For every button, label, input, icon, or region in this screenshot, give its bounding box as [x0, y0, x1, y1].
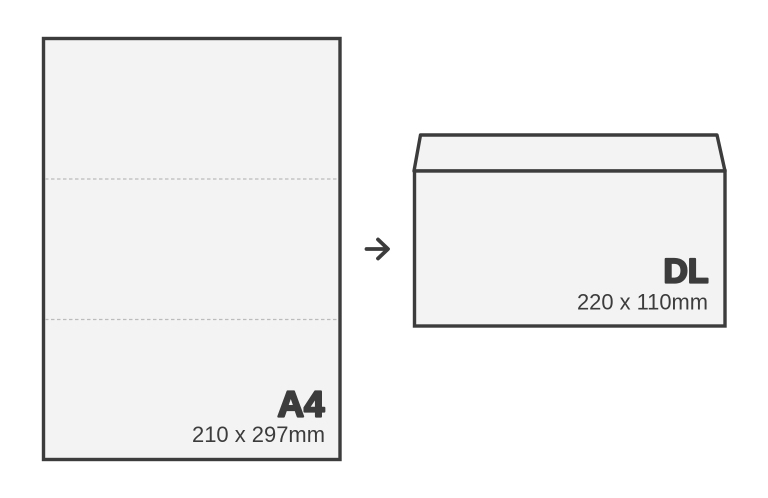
A4 sheet outline	[44, 38, 340, 460]
label: A4: A4	[278, 384, 324, 424]
label: DL dimensions: 220 x 110mm	[577, 290, 708, 314]
icon: arrow	[366, 240, 388, 258]
envelope body	[414, 171, 725, 326]
label: A4 dimensions: 210 x 297mm	[192, 422, 325, 447]
envelope flap	[414, 135, 725, 171]
label: DL: DL	[664, 252, 708, 290]
panel: DL envelope	[414, 135, 725, 326]
panel: A4 sheet	[44, 38, 340, 460]
